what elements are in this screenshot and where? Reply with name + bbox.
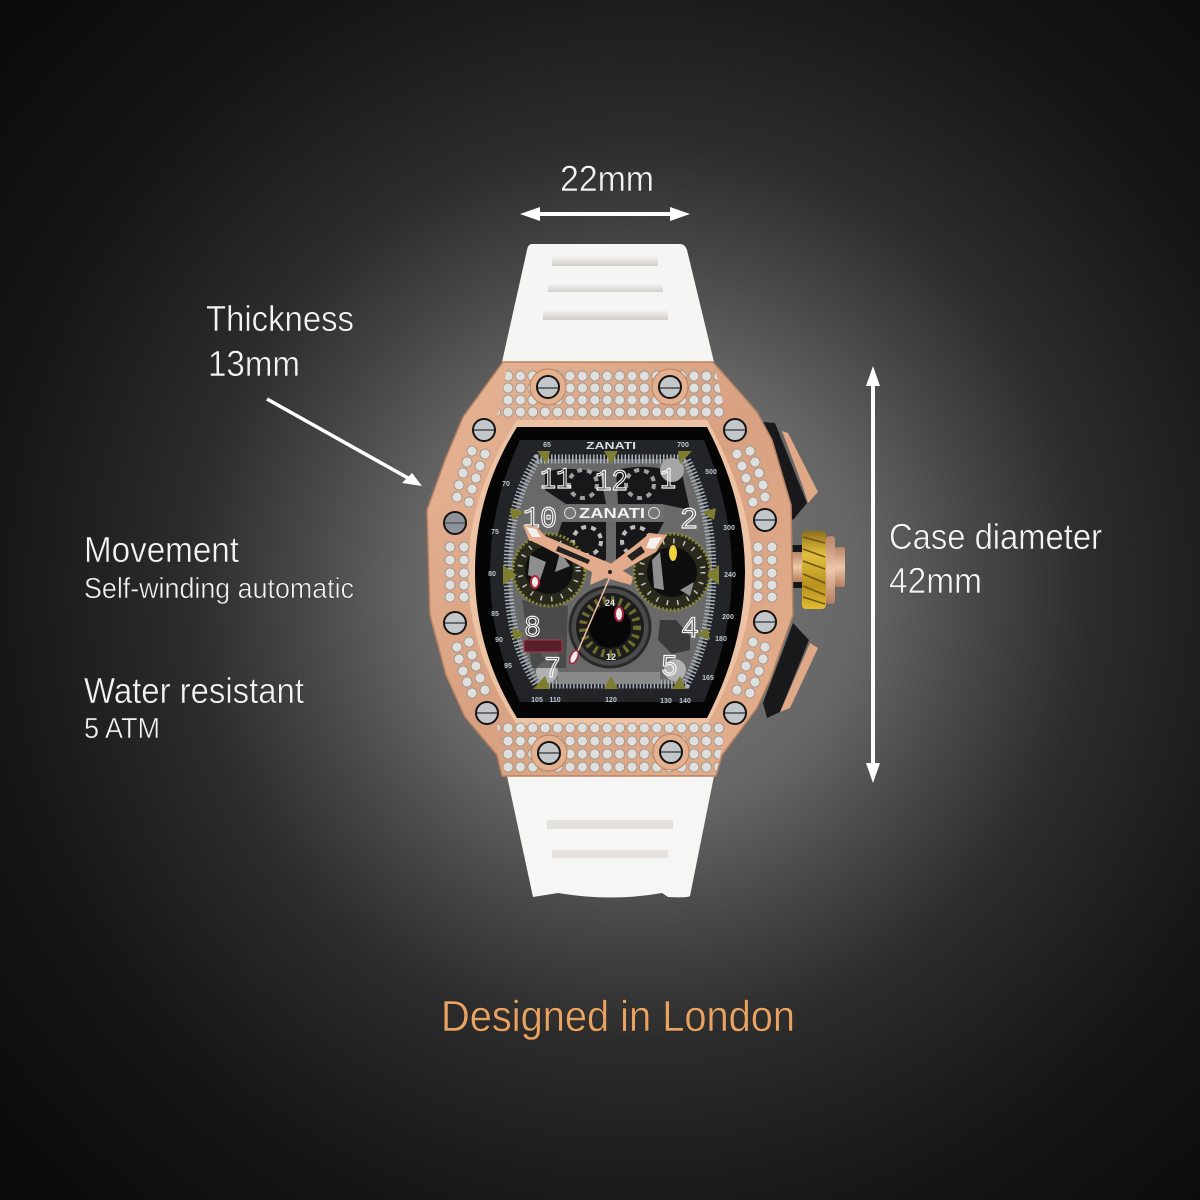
tachymeter scale: 75 xyxy=(491,529,499,536)
minute hand xyxy=(523,525,633,585)
hour numerals: 11 xyxy=(540,464,572,498)
hour numerals: 8 xyxy=(524,612,541,646)
case diameter label xyxy=(889,516,1102,601)
tachymeter scale: 90 xyxy=(495,637,503,644)
thickness label xyxy=(206,298,354,384)
upper pusher xyxy=(763,422,818,520)
screw rings xyxy=(530,369,689,771)
movement spec: Movement xyxy=(84,529,239,570)
tachymeter scale: 140 xyxy=(679,698,691,705)
right subdial xyxy=(634,534,710,610)
date window xyxy=(524,640,562,652)
top strap xyxy=(502,244,714,362)
skeleton gears xyxy=(522,458,690,684)
tachymeter scale: 300 xyxy=(723,525,735,532)
tachymeter scale: 180 xyxy=(715,636,727,643)
hour numerals: 10 xyxy=(523,503,557,537)
crown xyxy=(790,531,845,609)
inner brand: ZANATI xyxy=(579,505,645,522)
lower pusher xyxy=(763,623,818,718)
tachymeter scale: 500 xyxy=(705,469,717,476)
tachymeter scale: 110 xyxy=(549,697,561,704)
tachymeter scale: 120 xyxy=(605,697,617,704)
arrow: strap width xyxy=(520,207,690,221)
hour markers xyxy=(503,451,719,689)
case diameter label: 42mm xyxy=(889,560,982,601)
second hand tip xyxy=(568,650,580,664)
bottom subdial xyxy=(570,587,650,667)
thickness label: Thickness xyxy=(206,298,354,339)
tachymeter scale: 105 xyxy=(531,697,543,704)
hour numerals: 5 xyxy=(661,651,678,685)
tachymeter scale: 130 xyxy=(660,698,672,705)
hatched track xyxy=(508,459,712,684)
watch dial xyxy=(470,420,750,725)
watch case xyxy=(427,362,793,776)
tagline: Designed in London xyxy=(441,992,795,1041)
top brand: ZANATI xyxy=(586,440,636,452)
tachymeter scale: 65 xyxy=(543,442,551,449)
screws xyxy=(444,376,776,764)
case diameter label: Case diameter xyxy=(889,516,1102,557)
hour hand xyxy=(611,533,667,571)
movement spec xyxy=(84,529,354,605)
tachymeter scale: 240 xyxy=(724,572,736,579)
scale face xyxy=(490,440,732,702)
tachymeter scale: 80 xyxy=(488,571,496,578)
water resistance spec xyxy=(84,670,304,745)
tachymeter scale: 95 xyxy=(504,663,512,670)
thickness label: 13mm xyxy=(208,343,300,384)
arrow: case diameter xyxy=(866,366,880,783)
water resistance spec: 5 ATM xyxy=(84,713,160,745)
tachymeter scale: 200 xyxy=(722,614,734,621)
stones: bottom band xyxy=(497,722,727,774)
hour numerals: 12 xyxy=(595,466,628,500)
left subdial xyxy=(513,534,585,606)
hour numerals xyxy=(523,464,699,687)
stones: side clusters xyxy=(445,446,777,698)
tachymeter scale: 70 xyxy=(502,481,510,488)
hour numerals: 2 xyxy=(680,504,698,538)
hour numerals: 4 xyxy=(681,613,699,647)
22mm label: 22mm xyxy=(560,158,654,199)
tachymeter scale xyxy=(488,442,736,705)
hour numerals: 1 xyxy=(660,464,676,498)
second hand xyxy=(578,578,610,652)
bottom subdial: 12 xyxy=(606,652,616,662)
bottom strap xyxy=(507,776,714,898)
tachymeter scale: 700 xyxy=(677,442,689,449)
tachymeter scale: 85 xyxy=(491,611,499,618)
bottom subdial: 24 xyxy=(605,598,615,608)
water resistance spec: Water resistant xyxy=(84,670,304,711)
movement spec: Self-winding automatic xyxy=(84,573,354,605)
stones: top band xyxy=(497,369,727,419)
arrow: thickness xyxy=(267,399,422,486)
tachymeter scale: 165 xyxy=(702,675,714,682)
hour numerals: 7 xyxy=(544,653,561,687)
inner brand screws xyxy=(564,508,660,518)
